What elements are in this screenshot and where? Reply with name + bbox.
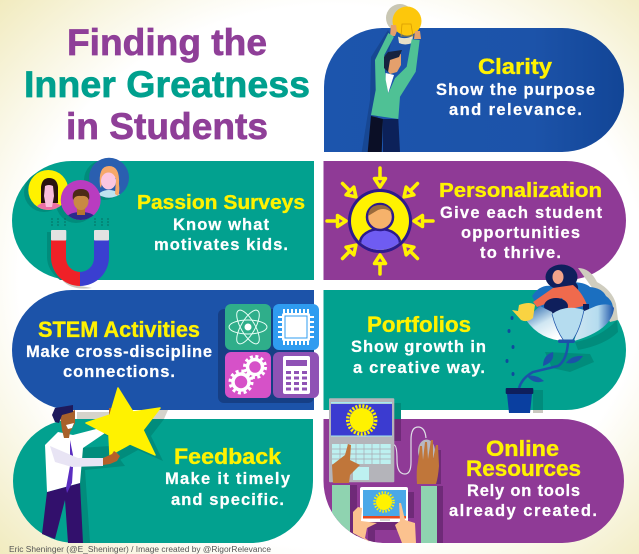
panel: personalization: opportunities	[461, 224, 580, 242]
title	[24, 21, 310, 147]
panel: online resources: Resources	[466, 456, 581, 481]
panel: clarity: Clarity	[478, 54, 553, 79]
panel: passion surveys	[12, 158, 314, 289]
panel: feedback: and specific.	[171, 491, 284, 509]
title: in Students	[66, 105, 268, 147]
panel: clarity	[324, 4, 624, 152]
credit line: Eric Sheninger (@E_Sheninger) / Image created by @RigorRelevance	[9, 545, 272, 554]
panel: passion surveys: motivates kids.	[154, 236, 288, 254]
title: Finding the	[67, 21, 267, 63]
icon: stem tiles	[218, 304, 319, 403]
tile: microchip	[273, 304, 319, 350]
panel: stem activities: STEM Activities	[38, 317, 200, 342]
panel: stem activities: connections.	[63, 363, 175, 381]
panel: personalization	[324, 161, 626, 280]
panel: portfolios: Portfolios	[367, 312, 471, 337]
tile: gears	[225, 352, 271, 398]
panel: feedback	[13, 388, 313, 543]
icon: man holding light bulb	[362, 4, 422, 152]
icon: student surrounded by arrows	[327, 168, 433, 274]
icon: student faces	[24, 158, 129, 226]
panel: feedback: Feedback	[174, 444, 282, 469]
panel: portfolios: a creative way.	[353, 359, 485, 377]
panel: online resources: already created.	[449, 502, 597, 520]
title: Inner Greatness	[24, 63, 310, 105]
panel: passion surveys: Know what	[173, 216, 270, 234]
panel: feedback: Make it timely	[165, 470, 291, 488]
panel: stem activities	[12, 290, 319, 410]
panel: personalization: to thrive.	[480, 244, 561, 262]
icon: laptop, mouse and tablet with hands	[329, 398, 443, 543]
panel: online resources	[324, 398, 624, 543]
tile: atom	[225, 304, 271, 350]
panel: passion surveys: Passion Surveys	[137, 191, 305, 214]
panel: personalization: Give each student	[440, 204, 602, 222]
icon: magnet	[47, 218, 109, 289]
panel: stem activities: Make cross-discipline	[26, 343, 212, 361]
panel: online resources: Online	[486, 436, 559, 461]
panel: portfolios	[324, 264, 626, 413]
panel: portfolios: Show growth in	[351, 338, 486, 356]
icon: woman on flower watering plant	[506, 264, 618, 413]
panel: personalization: Personalization	[439, 179, 602, 202]
panel: clarity: Show the purpose	[436, 81, 595, 99]
panel: online resources: Rely on tools	[467, 482, 580, 500]
tile: calculator	[273, 352, 319, 398]
panel: clarity: and relevance.	[449, 101, 582, 119]
icon: man holding star	[42, 388, 168, 543]
